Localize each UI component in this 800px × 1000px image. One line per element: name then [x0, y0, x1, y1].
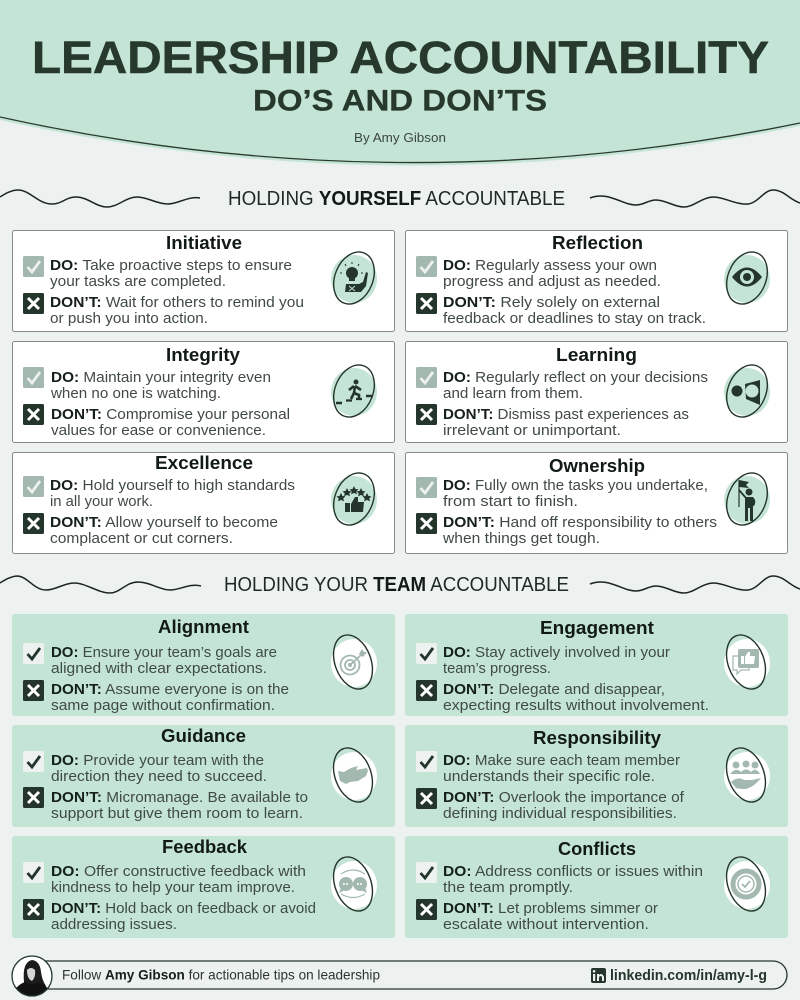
panel: ownership: when things get tough.: [442, 530, 600, 547]
heading: responsibility: Responsibility: [533, 728, 661, 748]
icon: dont cross: [23, 899, 44, 920]
panel: initiative: or push you into action.: [50, 310, 208, 327]
icon: do check: [416, 862, 437, 883]
heading: learning: Learning: [556, 345, 637, 365]
icon: dont cross: [416, 899, 437, 920]
panel: learning: [406, 342, 788, 442]
icon: check badge: [720, 852, 772, 916]
heading: conflicts: Conflicts: [558, 839, 636, 859]
section wave left: team: [0, 576, 201, 593]
icon: stars and thumbs up: [326, 467, 382, 531]
panel: integrity: [12, 342, 394, 442]
do text: DO: Offer constructive feedback with: [51, 863, 306, 880]
icon: lightbulb person: [326, 246, 382, 310]
heading: engagement: Engagement: [540, 618, 654, 638]
panel: feedback: kindness to help your team improve.: [51, 879, 295, 896]
icon: dont cross: [23, 787, 44, 808]
do text: DO: Hold yourself to high standards: [50, 477, 295, 494]
footer pill: [30, 961, 787, 989]
panel: feedback: [12, 836, 395, 938]
panel: conflicts: escalate without intervention.: [443, 916, 649, 933]
icon: helping hand: [327, 743, 379, 807]
icon: do check: [23, 367, 44, 388]
panel: integrity: values for ease or convenience.: [51, 422, 266, 439]
footer follow text: Follow Amy Gibson for actionable tips on leadership: [62, 966, 380, 982]
dont text: DON’T: Rely solely on external: [443, 294, 660, 311]
panel: learning: and learn from them.: [443, 385, 583, 402]
dont text: DON’T: Delegate and disappear,: [443, 681, 665, 698]
icon: dont cross: [23, 293, 44, 314]
panel: guidance: support but give them room to learn.: [51, 805, 303, 822]
icon: do check: [416, 256, 437, 277]
icon: do check: [416, 367, 437, 388]
dont text: DON’T: Hand off responsibility to others: [443, 514, 717, 531]
subtitle: DO’S AND DON’TS: [253, 84, 547, 118]
panel: excellence: in all your work.: [50, 493, 153, 510]
icon: eye: [719, 246, 775, 310]
dont text: DON’T: Micromanage. Be available to: [51, 789, 308, 806]
panel: ownership: from start to finish.: [443, 493, 578, 510]
section wave left: yourself: [0, 190, 200, 207]
icon: do check: [23, 751, 44, 772]
dont text: DON’T: Overlook the importance of: [443, 789, 685, 806]
header banner: [0, 0, 800, 166]
icon: do check: [416, 643, 437, 664]
dont text: DON’T: Let problems simmer or: [443, 900, 658, 917]
dont text: DON’T: Assume everyone is on the: [51, 681, 289, 698]
section heading: team: HOLDING YOUR TEAM ACCOUNTABLE: [224, 574, 569, 596]
icon: head and mirror: [719, 359, 775, 423]
heading: integrity: Integrity: [166, 345, 240, 365]
icon: dont cross: [416, 404, 437, 425]
icon: do check: [416, 477, 437, 498]
panel: responsibility: [405, 725, 788, 827]
panel: responsibility: understands their specific role.: [443, 768, 655, 785]
dont text: DON’T: Wait for others to remind you: [50, 294, 304, 311]
panel: guidance: [12, 725, 395, 827]
panel: engagement: [405, 614, 788, 716]
icon: do check: [23, 862, 44, 883]
icon: do check: [23, 476, 44, 497]
dont text: DON’T: Hold back on feedback or avoid: [51, 900, 316, 917]
heading: initiative: Initiative: [166, 233, 242, 253]
section heading: yourself: HOLDING YOURSELF ACCOUNTABLE: [228, 188, 565, 210]
icon: dont cross: [23, 680, 44, 701]
panel: excellence: complacent or cut corners.: [50, 530, 233, 547]
icon: do check: [23, 256, 44, 277]
section wave right: team: [590, 576, 800, 593]
icon: person climbing steps: [326, 359, 382, 423]
do text: DO: Make sure each team member: [443, 752, 680, 769]
heading: excellence: Excellence: [155, 453, 253, 473]
footer bar: [12, 956, 787, 998]
icon: dont cross: [23, 404, 44, 425]
heading: alignment: Alignment: [158, 617, 249, 637]
icon: person with flag: [719, 467, 775, 531]
panel: conflicts: the team promptly.: [443, 879, 573, 896]
linkedin url: linkedin.com/in/amy-l-g: [610, 967, 767, 984]
dont text: DON’T: Allow yourself to become: [50, 514, 278, 531]
panel: conflicts: [405, 836, 788, 938]
title: LEADERSHIP ACCOUNTABILITY: [32, 32, 769, 83]
panel: initiative: your tasks are completed.: [50, 273, 226, 290]
icon: dont cross: [23, 513, 44, 534]
heading: reflection: Reflection: [552, 233, 643, 253]
icon: do check: [416, 751, 437, 772]
panel: feedback: addressing issues.: [51, 916, 177, 933]
panel: integrity: when no one is watching.: [50, 385, 221, 402]
panel: engagement: expecting results without involvement.: [443, 697, 709, 714]
dont text: DON’T: Dismiss past experiences as: [443, 406, 689, 423]
icon: linkedin: [591, 968, 606, 983]
panel: alignment: [12, 614, 395, 716]
icon: do check: [23, 643, 44, 664]
panel: alignment: aligned with clear expectations.: [51, 660, 267, 677]
panel: reflection: feedback or deadlines to stay on track.: [443, 310, 706, 327]
panel: engagement: team’s progress.: [443, 660, 551, 677]
heading: ownership: Ownership: [549, 456, 645, 476]
do text: DO: Ensure your team’s goals are: [51, 644, 277, 661]
panel: reflection: progress and adjust as needed.: [443, 273, 661, 290]
author photo: [12, 956, 52, 998]
icon: speech bubbles: [327, 852, 379, 916]
icon: dont cross: [416, 513, 437, 534]
do text: DO: Address conflicts or issues within: [443, 863, 703, 880]
panel: responsibility: defining individual responsibilities.: [443, 805, 677, 822]
do text: DO: Take proactive steps to ensure: [50, 257, 292, 274]
panel: ownership: [406, 452, 788, 554]
section wave right: yourself: [590, 190, 800, 207]
icon: dont cross: [416, 788, 437, 809]
panel: excellence: [12, 452, 394, 554]
byline: By Amy Gibson: [354, 130, 446, 145]
icon: target: [327, 630, 379, 694]
panel: initiative: [12, 230, 394, 332]
heading: guidance: Guidance: [161, 726, 246, 746]
do text: DO: Provide your team with the: [51, 752, 264, 769]
icon: thumbs up bubble: [720, 630, 772, 694]
panel: learning: irrelevant or unimportant.: [443, 422, 621, 439]
do text: DO: Regularly reflect on your decisions: [443, 369, 708, 386]
heading: feedback: Feedback: [162, 837, 248, 857]
icon: dont cross: [416, 293, 437, 314]
icon: team in hand: [720, 743, 772, 807]
panel: guidance: direction they need to succeed.: [51, 768, 267, 785]
do text: DO: Fully own the tasks you undertake,: [443, 477, 708, 494]
dont text: DON’T: Compromise your personal: [51, 406, 290, 423]
do text: DO: Stay actively involved in your: [443, 644, 670, 661]
panel: alignment: same page without confirmation.: [51, 697, 275, 714]
do text: DO: Maintain your integrity even: [51, 369, 271, 386]
panel: reflection: [406, 230, 788, 332]
icon: dont cross: [416, 680, 437, 701]
do text: DO: Regularly assess your own: [443, 257, 657, 274]
